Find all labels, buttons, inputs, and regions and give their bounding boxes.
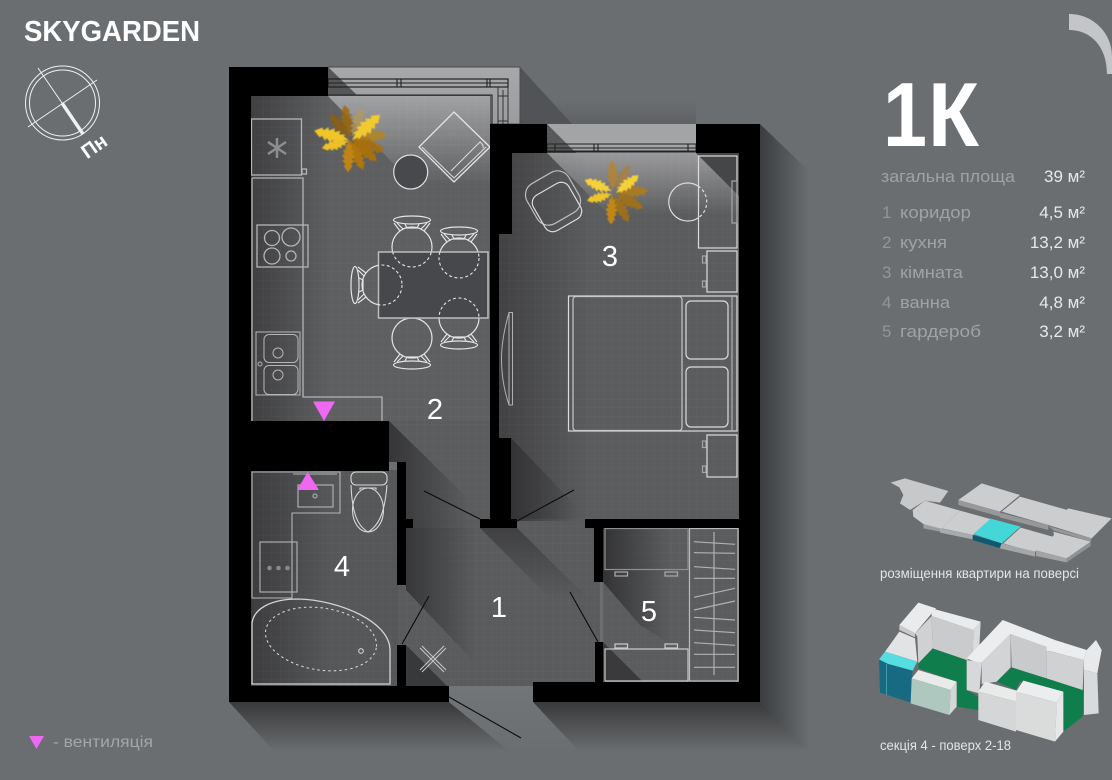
- room numbers: 3: [602, 241, 618, 273]
- legend: - вентиляція: [53, 734, 153, 751]
- X mark: [420, 646, 446, 672]
- room numbers: 5: [641, 596, 657, 628]
- vanity: [252, 472, 340, 598]
- fridge: [252, 119, 306, 175]
- row 5: 3,2 м²: [1039, 322, 1085, 341]
- row 1: 1: [882, 203, 891, 222]
- armchair: [521, 166, 585, 235]
- bed: [568, 296, 737, 431]
- row 4: 4: [882, 293, 891, 312]
- vent triangle: kitchen: [313, 402, 335, 421]
- building caption: секція 4 - поверх 2-18: [880, 738, 1011, 753]
- floor plan key: [891, 478, 1112, 562]
- apartment type: 1: [883, 65, 927, 166]
- courtyards: [918, 648, 1083, 732]
- side table: [669, 183, 707, 221]
- nightstand lower: [702, 435, 737, 477]
- row 1: 4,5 м²: [1039, 203, 1085, 222]
- row 3: [882, 263, 1085, 282]
- highlighted section: [879, 652, 917, 703]
- sink: [256, 332, 300, 395]
- total area: 39 м²: [1044, 167, 1085, 186]
- row 2: [882, 233, 1085, 252]
- room numbers: [334, 241, 657, 628]
- row 1: [882, 203, 1085, 222]
- row 3: 13,0 м²: [1030, 263, 1085, 282]
- row 1: коридор: [900, 203, 971, 222]
- highlighted apartment: [973, 519, 1021, 548]
- room numbers: 4: [334, 551, 350, 583]
- plant: kitchen palm: [312, 104, 388, 173]
- room numbers: 2: [427, 394, 443, 426]
- back towers: [885, 603, 1102, 715]
- row 4: [882, 293, 1085, 312]
- interior diagonal shadows: [389, 421, 672, 686]
- floor: [251, 96, 740, 752]
- toilet: [351, 472, 387, 532]
- row 5: [882, 322, 1085, 341]
- apartment type: К: [928, 65, 979, 166]
- hidden chair seats: [378, 252, 480, 318]
- shelf bottom: [605, 644, 688, 681]
- room furniture: [502, 156, 737, 477]
- dining set: [351, 216, 488, 369]
- total area: [881, 167, 1085, 186]
- row 2: 13,2 м²: [1030, 233, 1085, 252]
- cooktop: [257, 225, 308, 267]
- walls: [229, 67, 449, 702]
- north label: Пн: [77, 130, 112, 163]
- desk: [698, 156, 737, 248]
- row 2: кухня: [900, 233, 947, 252]
- counter: [252, 178, 382, 421]
- row 3: 3: [882, 263, 891, 282]
- row 3: кімната: [900, 263, 964, 282]
- area table: [881, 167, 1085, 341]
- building model: [879, 603, 1102, 742]
- chairs: [351, 216, 479, 369]
- wardrobe: [605, 528, 738, 681]
- exterior wall shadows: [229, 67, 810, 752]
- row 4: ванна: [900, 293, 951, 312]
- wall: kitchen-room partition: [480, 124, 547, 528]
- balcony: kitchen: [328, 67, 520, 124]
- rail with hangers: [690, 528, 738, 681]
- wall: room right and bottom: [533, 124, 760, 702]
- total area: загальна площа: [881, 167, 1016, 186]
- table: [378, 252, 488, 318]
- doors: [402, 490, 598, 738]
- vent triangle: bathroom: [297, 472, 319, 490]
- balcony: room: [547, 124, 696, 153]
- tv: [502, 312, 512, 405]
- row 5: гардероб: [900, 322, 981, 341]
- key caption: розміщення квартири на поверсі: [880, 566, 1079, 581]
- shower tray: [260, 542, 297, 592]
- compass: [26, 66, 112, 163]
- shelf top: [605, 528, 688, 576]
- logo: SKYGARDEN: [24, 16, 200, 48]
- window light beams: [328, 96, 739, 215]
- room numbers: 1: [491, 592, 507, 624]
- row 5: 5: [882, 322, 891, 341]
- row 2: 2: [882, 233, 891, 252]
- row 4: 4,8 м²: [1039, 293, 1085, 312]
- bathtub: [252, 599, 390, 684]
- nightstand upper: [702, 251, 737, 292]
- apartment type: [883, 65, 979, 166]
- front right boxes: [978, 681, 1063, 742]
- plant: room palm: [582, 160, 649, 225]
- lounge: round table and armchair: [394, 112, 490, 189]
- corner arc: [1069, 14, 1112, 74]
- kitchen furniture: [252, 119, 382, 421]
- front left box: [911, 670, 957, 715]
- bathroom fixtures: [252, 472, 390, 684]
